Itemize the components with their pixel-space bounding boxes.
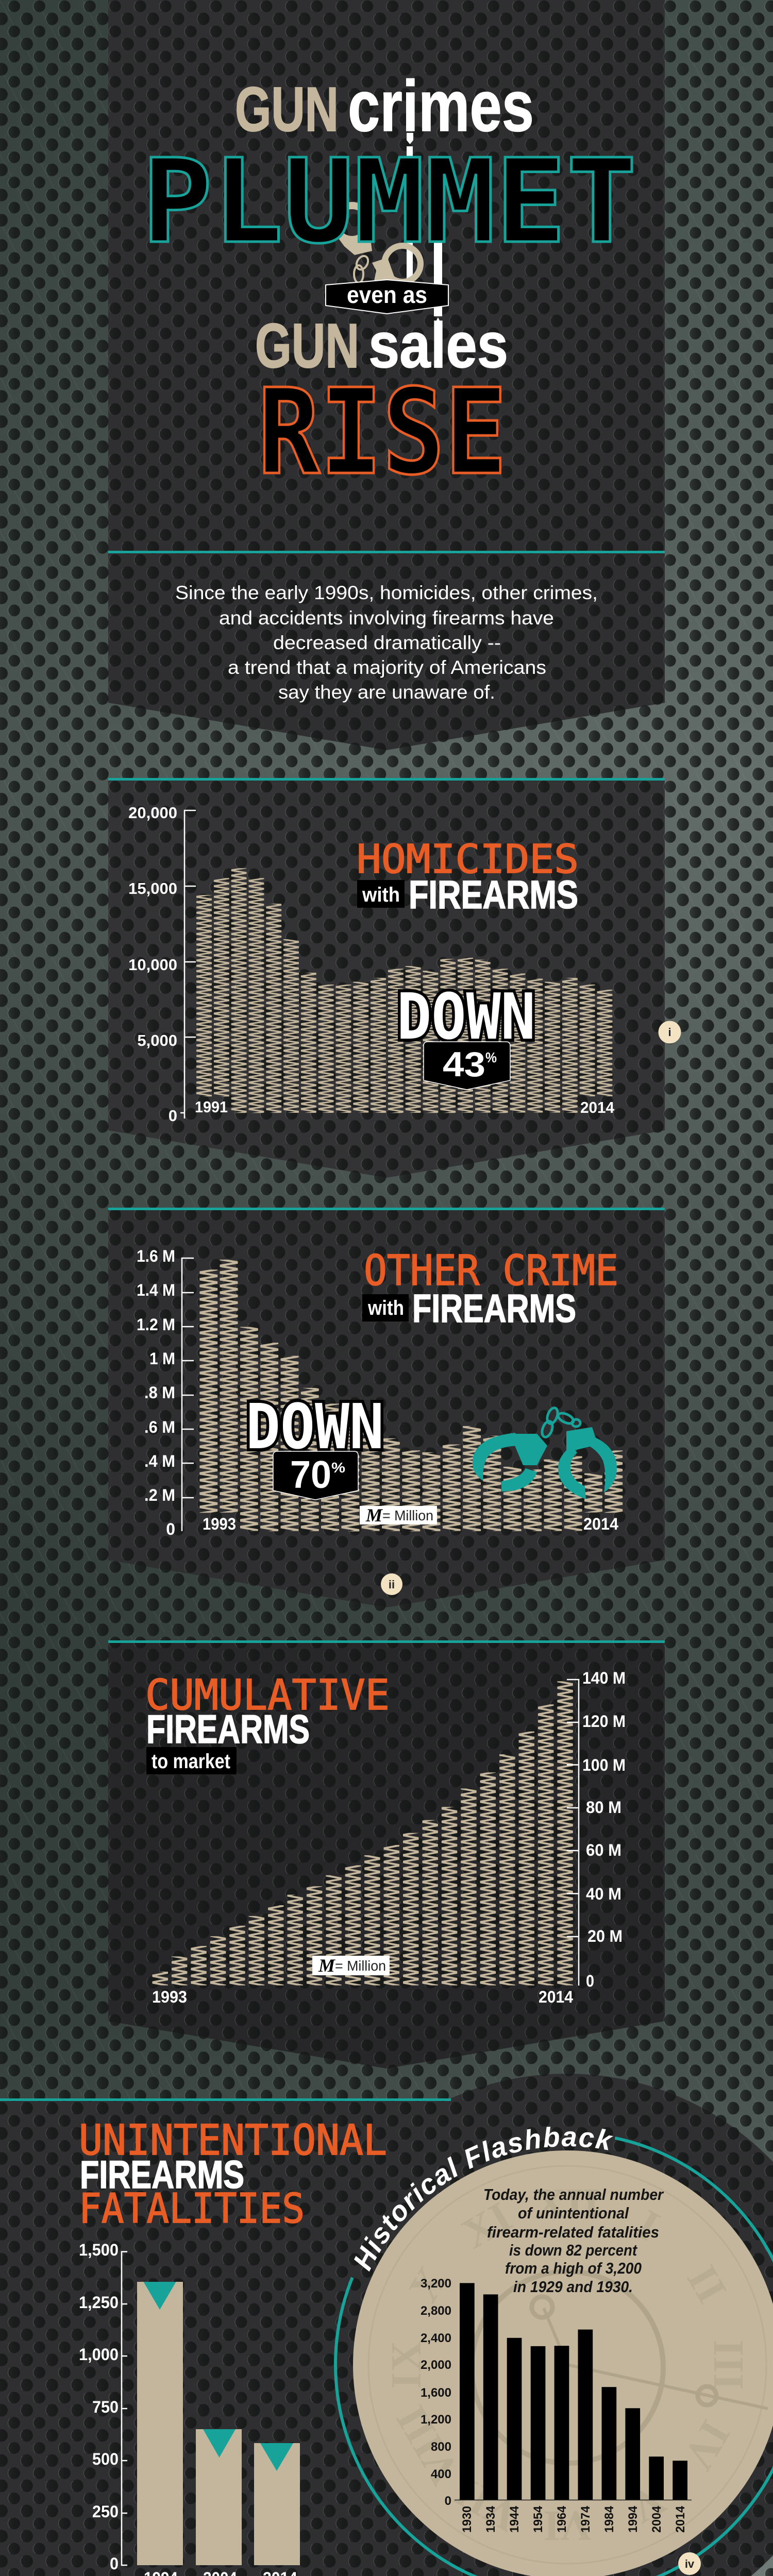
text block: flashback statement bbox=[483, 2185, 664, 2296]
callout: down 43 percent: 43 bbox=[443, 1045, 485, 1084]
chart: historical fatalities bars: 1934 bbox=[484, 2505, 498, 2533]
callout: down 70 percent: 70 bbox=[290, 1453, 331, 1496]
legend: M equals million: M bbox=[318, 1955, 336, 1976]
heading: GUN sales: GUN bbox=[255, 311, 359, 381]
chart: historical fatalities bars: 1,600 bbox=[421, 2386, 451, 2400]
text block: flashback statement: Today, the annual number bbox=[483, 2185, 664, 2204]
axis: other crime: 0 bbox=[166, 1520, 175, 1538]
heading: other crime with firearms bbox=[362, 1247, 618, 1331]
axis: fatalities: 1,500 bbox=[79, 2241, 119, 2259]
legend: M equals million bbox=[360, 1505, 437, 1526]
badge: source i bbox=[659, 1021, 681, 1044]
heading: cumulative firearms to market: CUMULATIVE bbox=[145, 1671, 390, 1720]
text block: introduction: Since the early 1990s, homicides, other crimes, bbox=[175, 582, 598, 603]
callout: down 70 percent: % bbox=[331, 1460, 345, 1476]
chart: fatalities bars bbox=[137, 2282, 300, 2576]
icon: teal handcuffs bbox=[473, 1406, 617, 1499]
axis: other crime: 1993 bbox=[203, 1515, 236, 1533]
heading: PLUMMET: PLUMMET bbox=[142, 134, 637, 269]
chart: historical fatalities bars: 400 bbox=[431, 2467, 451, 2481]
heading: unintentional firearms fatalities: FATALITIES bbox=[79, 2185, 305, 2232]
chart: historical fatalities bars: 1984 bbox=[602, 2505, 616, 2533]
axis: homicides: 15,000 bbox=[128, 879, 177, 897]
callout: down 43 percent: DOWN bbox=[397, 980, 535, 1054]
text block: introduction: a trend that a majority of Americans bbox=[228, 657, 546, 678]
heading: GUN sales: sales bbox=[368, 310, 508, 381]
heading: RISE: RISE bbox=[258, 364, 507, 501]
chart: historical fatalities bars: 1974 bbox=[579, 2505, 593, 2533]
clock face decoration: XI bbox=[454, 2193, 519, 2258]
heading: cumulative firearms to market bbox=[145, 1671, 390, 1774]
panel: other crime with firearms bbox=[108, 1208, 665, 1607]
text block: introduction bbox=[175, 582, 598, 703]
axis: cumulative: 40 M bbox=[586, 1885, 621, 1903]
heading: other crime with firearms: OTHER CRIME bbox=[364, 1247, 618, 1295]
heading: cumulative firearms to market: FIREARMS bbox=[146, 1706, 310, 1752]
clock face decoration: III bbox=[704, 2340, 752, 2390]
heading: other crime with firearms: FIREARMS bbox=[412, 1286, 576, 1331]
axis: cumulative: 60 M bbox=[586, 1841, 621, 1859]
axis: other crime bbox=[137, 1247, 618, 1538]
chart: historical fatalities bars: 2004 bbox=[650, 2505, 664, 2533]
legend: M equals million: M bbox=[365, 1505, 383, 1526]
chart: historical fatalities bars: 1994 bbox=[626, 2505, 640, 2533]
axis: other crime: .2 M bbox=[144, 1486, 175, 1504]
clock face decoration bbox=[368, 2166, 768, 2564]
chart: historical fatalities bars: 1,200 bbox=[421, 2413, 451, 2427]
chart: historical fatalities bars: 1954 bbox=[531, 2505, 545, 2533]
clock face decoration: V bbox=[623, 2476, 674, 2533]
heading: unintentional firearms fatalities: UNINTENTIONAL bbox=[79, 2116, 387, 2165]
axis: homicides: 2014 bbox=[580, 1098, 615, 1116]
axis: cumulative: 120 M bbox=[582, 1712, 626, 1731]
text block: introduction: say they are unaware of. bbox=[278, 682, 495, 703]
axis: other crime: 1 M bbox=[149, 1349, 175, 1368]
chart: historical fatalities bars: 1944 bbox=[508, 2505, 522, 2533]
ring: teal arc bbox=[335, 2138, 773, 2576]
badge: source iv: iv bbox=[685, 2557, 695, 2570]
panel: unintentional firearms fatalities bbox=[0, 2074, 773, 2576]
chart: historical fatalities bars: 0 bbox=[445, 2494, 451, 2508]
axis: cumulative: 1993 bbox=[152, 1988, 187, 2006]
chart: historical fatalities bars: 2014 bbox=[674, 2505, 687, 2533]
heading: homicides with firearms bbox=[357, 837, 579, 917]
clock face decoration: VI bbox=[543, 2502, 592, 2550]
clock face decoration: VIII bbox=[386, 2398, 469, 2493]
heading: unintentional firearms fatalities bbox=[79, 2116, 387, 2232]
heading: unintentional firearms fatalities: FIREARMS bbox=[80, 2153, 244, 2197]
axis: other crime: 2014 bbox=[583, 1515, 618, 1533]
clock face decoration: II bbox=[678, 2258, 736, 2311]
text block: introduction: and accidents involving firearms have bbox=[219, 607, 554, 629]
clock face decoration: IX bbox=[382, 2341, 430, 2389]
axis: fatalities: 500 bbox=[92, 2450, 119, 2468]
axis: other crime: .6 M bbox=[144, 1418, 175, 1436]
heading: GUN crimes: crimes bbox=[348, 65, 534, 146]
axis: homicides: 5,000 bbox=[137, 1031, 177, 1049]
heading: homicides with firearms: with bbox=[362, 884, 400, 906]
label: even as: even as bbox=[347, 281, 427, 308]
text block: introduction: decreased dramatically -- bbox=[273, 632, 501, 653]
axis: homicides: 1991 bbox=[195, 1098, 228, 1116]
clock face decoration: IV bbox=[674, 2413, 740, 2478]
axis: fatalities: 1,000 bbox=[79, 2345, 119, 2364]
axis: other crime: 1.6 M bbox=[137, 1247, 175, 1265]
chart: homicides spring bars bbox=[196, 868, 612, 1113]
panel: historical flashback clock bbox=[334, 2127, 773, 2576]
axis: fatalities: 1,250 bbox=[79, 2293, 119, 2312]
chart: historical fatalities bars: 2,800 bbox=[421, 2304, 451, 2318]
axis: cumulative: 80 M bbox=[586, 1798, 621, 1817]
heading: GUN crimes bbox=[235, 65, 534, 146]
clock face decoration: X bbox=[399, 2259, 457, 2310]
axis: cumulative: 0 bbox=[586, 1972, 594, 1990]
callout: down 43 percent: % bbox=[485, 1049, 497, 1065]
legend: M equals million: = Million bbox=[382, 1507, 433, 1523]
chart: cumulative spring bars bbox=[152, 1681, 573, 1986]
heading: homicides with firearms: HOMICIDES bbox=[357, 837, 579, 883]
text block: flashback statement: firearm-related fatalities bbox=[487, 2223, 659, 2241]
heading: GUN crimes: GUN bbox=[235, 74, 339, 144]
axis: cumulative: 20 M bbox=[587, 1927, 623, 1945]
chart: historical fatalities bars: 3,200 bbox=[421, 2277, 451, 2291]
text block: flashback statement: of unintentional bbox=[518, 2204, 629, 2222]
chart: historical fatalities bars: 1964 bbox=[555, 2505, 569, 2533]
chart: historical fatalities bars: 2,400 bbox=[421, 2331, 451, 2345]
axis: other crime: 1.2 M bbox=[137, 1315, 175, 1334]
callout: down 70 percent bbox=[246, 1392, 384, 1500]
text block: flashback statement: in 1929 and 1930. bbox=[513, 2278, 633, 2296]
legend: M equals million bbox=[312, 1955, 390, 1976]
legend: M equals million: = Million bbox=[335, 1958, 386, 1974]
heading: homicides with firearms: FIREARMS bbox=[409, 873, 578, 917]
clock face decoration: XII bbox=[535, 2180, 600, 2228]
axis: other crime: .8 M bbox=[144, 1383, 175, 1402]
axis: homicides: 0 bbox=[169, 1107, 177, 1125]
clock face decoration: I bbox=[629, 2200, 667, 2250]
callout: down 43 percent bbox=[397, 980, 535, 1090]
chart: historical fatalities bars: 800 bbox=[431, 2440, 451, 2454]
label: even as bbox=[326, 280, 448, 314]
axis: other crime: 1.4 M bbox=[137, 1281, 175, 1299]
clock face decoration: VII bbox=[447, 2467, 527, 2541]
text block: flashback statement: is down 82 percent bbox=[509, 2241, 637, 2259]
axis: homicides bbox=[128, 804, 615, 1125]
axis: cumulative bbox=[152, 1669, 626, 2006]
panel: title and introduction bbox=[108, 0, 665, 750]
heading: cumulative firearms to market: to market bbox=[152, 1750, 230, 1773]
axis: cumulative: 100 M bbox=[582, 1756, 626, 1774]
axis: fatalities: 0 bbox=[110, 2554, 119, 2573]
chart: historical fatalities bars bbox=[421, 2277, 692, 2533]
axis: other crime: .4 M bbox=[144, 1452, 175, 1470]
axis: fatalities bbox=[79, 2241, 127, 2573]
axis: cumulative: 140 M bbox=[582, 1669, 626, 1687]
text block: flashback statement: from a high of 3,200 bbox=[505, 2259, 642, 2277]
badge: source ii: ii bbox=[389, 1578, 395, 1591]
chart: historical fatalities bars: 2,000 bbox=[421, 2358, 451, 2372]
badge: source i: i bbox=[668, 1026, 671, 1039]
axis: homicides: 20,000 bbox=[128, 804, 177, 822]
badge: source iv bbox=[678, 2552, 701, 2575]
panel: homicides with firearms bbox=[108, 778, 665, 1178]
axis: cumulative: 2014 bbox=[539, 1988, 573, 2006]
icon: tan handcuffs bbox=[335, 206, 421, 283]
panel: cumulative firearms to market bbox=[108, 1640, 665, 2069]
heading: historical flashback: Historical Flashback bbox=[354, 2127, 613, 2272]
badge: source ii bbox=[381, 1573, 402, 1595]
heading: other crime with firearms: with bbox=[367, 1297, 404, 1319]
chart: other crime spring bars bbox=[199, 1260, 623, 1531]
axis: homicides: 10,000 bbox=[128, 956, 177, 974]
heading: GUN sales bbox=[255, 310, 508, 381]
axis: fatalities: 250 bbox=[92, 2502, 119, 2521]
axis: fatalities: 750 bbox=[92, 2398, 119, 2416]
callout: down 70 percent: DOWN bbox=[246, 1392, 384, 1463]
chart: historical fatalities bars: 1930 bbox=[460, 2506, 474, 2533]
title graphic bbox=[142, 65, 637, 501]
line bars behind the headline bbox=[407, 133, 442, 326]
